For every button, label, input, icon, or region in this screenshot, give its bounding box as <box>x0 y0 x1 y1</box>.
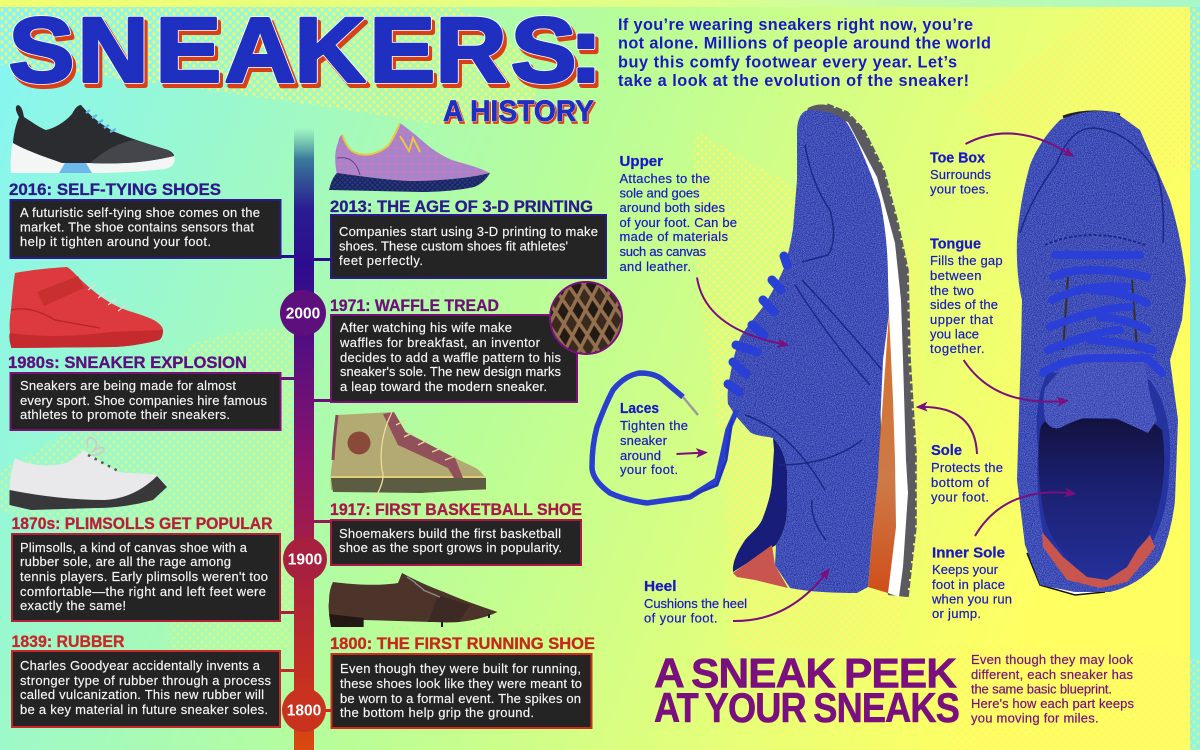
panel: 1980s: Sneakers are being made for almost <box>20 378 236 393</box>
heading: 2016: 2016: SELF-TYING SHOES <box>9 181 221 199</box>
label: Tongue: Tongue <box>930 237 981 253</box>
panel: 1980s: athletes to promote their sneakers. <box>20 407 230 422</box>
label: Laces: Laces <box>620 401 659 417</box>
heading: 1800: 1800: THE FIRST RUNNING SHOE <box>330 635 595 653</box>
heading: 2013: 2013: THE AGE OF 3-D PRINTING <box>330 198 593 216</box>
label: Sole: your foot. <box>931 490 989 504</box>
panel: 1839: be a key material in future sneaker soles. <box>20 702 268 717</box>
arrow: Laces <box>676 452 706 454</box>
panel: 1839: stronger type of rubber through a process <box>20 673 272 688</box>
timeline <box>280 128 331 750</box>
panel: 2013: Companies start using 3-D printing to make <box>339 224 598 239</box>
icon: red sneaker <box>9 267 163 348</box>
label: Tongue: the two <box>930 283 974 298</box>
label: Tongue: you lace <box>930 326 979 342</box>
photo: side view blue sneaker <box>592 104 915 597</box>
label: Upper: around both sides <box>620 200 726 215</box>
label: Upper: Upper <box>620 154 663 170</box>
text: blueprint note: Here's how each part keeps <box>971 696 1134 711</box>
panel: 2013: feet perfectly. <box>339 253 423 268</box>
panel: 1839: Charles Goodyear accidentally invents a <box>20 658 261 673</box>
icon: purple 3-D printed shoe <box>329 123 490 192</box>
label: Sole: bottom of <box>931 475 989 490</box>
panel: 1800: be worn to a formal event. The spikes on <box>340 691 581 706</box>
label: Toe Box <box>930 150 992 196</box>
label: Toe Box: your toes. <box>930 182 989 196</box>
panel: 2013: shoes. These custom shoes fit athletes' <box>339 238 568 254</box>
text: blueprint note: Even though they may look <box>971 652 1134 667</box>
panel: 1971: a leap toward the modern sneaker. <box>340 379 547 394</box>
panel: 1839: called vulcanization. This new rubber will <box>20 687 264 702</box>
intro text: not alone. Millions of people around the world <box>618 35 991 53</box>
label: Inner Sole <box>931 546 1012 621</box>
panel: 1870s: exactly the same! <box>20 598 126 613</box>
subtitle: A HISTORY <box>443 95 594 128</box>
arrow: Toe Box <box>966 133 1073 156</box>
panel: 2016: market. The shoe contains sensors that <box>20 220 254 234</box>
arrow: Tongue <box>964 360 1067 402</box>
label: Tongue: together. <box>930 341 985 356</box>
label: Inner Sole: when you run <box>931 592 1012 607</box>
panel: 1971 <box>331 315 577 402</box>
arrow: Heel <box>733 570 828 621</box>
label: Inner Sole: foot in place <box>932 577 1005 592</box>
label: Sole: Protects the <box>931 460 1003 475</box>
panel: 1839 <box>12 651 280 727</box>
heading: A Sneak Peek: A SNEAK PEEK <box>654 650 957 696</box>
label: Laces: your foot. <box>620 462 678 477</box>
label: Sole: Sole <box>931 443 962 459</box>
panel: 2016 <box>10 200 280 258</box>
label: Upper: of your foot. Can be <box>620 215 737 230</box>
intro text: If you’re wearing sneakers right now, you’re <box>618 16 973 34</box>
label: Upper: Attaches to the <box>620 171 710 186</box>
arrow: Inner Sole <box>975 492 1075 536</box>
label: Tongue: sides of the <box>930 297 998 312</box>
panel: 1800: the bottom help grip the ground. <box>340 705 534 720</box>
label: Inner Sole: Inner Sole <box>932 546 1005 562</box>
subtitle: A HISTORY <box>443 95 594 128</box>
panel: 1800: Even though they were built for running, <box>340 661 581 676</box>
heading: A Sneak Peek: AT YOUR SNEAKS <box>654 684 959 731</box>
label: Laces: around <box>620 448 661 463</box>
label: Upper: such as canvas <box>620 244 706 259</box>
arrow: Sole <box>918 407 977 454</box>
photo: top view blue sneaker <box>1017 111 1186 595</box>
label: Upper: and leather. <box>620 259 691 274</box>
title: SNEAKERS: <box>9 0 602 102</box>
label: Upper: sole and goes <box>620 186 700 200</box>
panel: 1870s <box>12 534 280 621</box>
label: Laces: Tighten the <box>620 418 688 433</box>
intro text <box>618 16 991 90</box>
panel: 2013 <box>331 215 606 278</box>
text: blueprint note: you moving for miles. <box>971 711 1099 726</box>
label: Toe Box: Toe Box <box>930 150 985 166</box>
heading: 1980s: 1980s: SNEAKER EXPLOSION <box>8 354 247 372</box>
panel: 1917: shoe as the sport grows in popularity. <box>339 540 562 555</box>
heading: 1839: 1839: RUBBER <box>12 633 125 651</box>
panel: 1980s <box>10 373 280 430</box>
label: Heel: Cushions the heel <box>644 596 747 611</box>
label: Sole <box>931 443 1003 504</box>
label: Toe Box: Surrounds <box>930 167 992 182</box>
title: SNEAKERS: <box>12 3 605 106</box>
panel: 2016: A futuristic self-tying shoe comes on the <box>20 205 260 220</box>
panel: 1800: these shoes look like they were meant to <box>340 676 582 691</box>
label: Tongue: Fills the gap <box>930 253 1003 268</box>
panel: 1971: waffles for breakfast, an inventor <box>339 335 541 350</box>
label: Heel: of your foot. <box>644 610 718 626</box>
text: blueprint note: the same basic blueprint. <box>971 682 1112 697</box>
panel: 1870s: tennis players. Early plimsolls weren't too <box>20 569 268 584</box>
intro text: buy this comfy footwear every year. Let’s <box>618 53 957 71</box>
icon: black self-tying shoe <box>11 105 175 173</box>
timeline: 1900 <box>288 552 322 568</box>
label: Heel: Heel <box>644 579 676 595</box>
panel: 1971: After watching his wife make <box>340 320 512 335</box>
panel: 1870s: Plimsolls, a kind of canvas shoe with a <box>20 540 248 555</box>
panel: 1971: sneaker's sole. The new design marks <box>340 364 562 379</box>
panel: 1800 <box>332 654 592 728</box>
label: Inner Sole: or jump. <box>932 606 981 621</box>
icon: waffle tread <box>550 282 622 354</box>
label: Inner Sole: Keeps your <box>932 562 999 577</box>
panel: 1917: Shoemakers build the first basketball <box>339 526 561 541</box>
intro text: take a look at the evolution of the sneaker! <box>618 72 969 90</box>
panel: 2016: help it tighten around your foot. <box>20 234 211 249</box>
heading: 1870s: 1870s: PLIMSOLLS GET POPULAR <box>12 515 273 533</box>
label: Laces: sneaker <box>620 433 668 448</box>
panel: 1917 <box>331 520 581 565</box>
panel: 1980s: every sport. Shoe companies hire famous <box>20 393 268 408</box>
icon: white plimsoll <box>10 438 167 510</box>
text: blueprint note: different, each sneaker has <box>971 667 1134 682</box>
panel: 1971: decides to add a waffle pattern to his <box>340 350 562 365</box>
text: blueprint note <box>971 652 1134 726</box>
label: Tongue: between <box>930 268 982 283</box>
heading: A Sneak Peek <box>654 650 959 731</box>
label: Upper: made of materials <box>620 229 728 244</box>
label: Heel <box>644 579 747 626</box>
heading: 1971: 1971: WAFFLE TREAD <box>330 297 499 315</box>
heading: 1917: 1917: FIRST BASKETBALL SHOE <box>330 501 582 519</box>
panel: 1870s: comfortable—the right and left feet were <box>20 584 266 599</box>
icon: brown running shoe <box>329 573 498 627</box>
label: Upper <box>620 154 737 274</box>
arrow: Upper <box>697 278 788 345</box>
label: Tongue <box>930 237 1003 356</box>
title: SNEAKERS: <box>9 0 602 102</box>
icon: basketball shoe <box>331 412 486 500</box>
label: Laces <box>620 401 688 477</box>
timeline: 1800 <box>287 702 321 720</box>
panel: 1870s: rubber sole, are all the rage among <box>20 554 231 569</box>
label: Tongue: upper that <box>930 312 993 327</box>
subtitle: A HISTORY <box>444 97 596 130</box>
timeline: 2000 <box>286 306 320 322</box>
